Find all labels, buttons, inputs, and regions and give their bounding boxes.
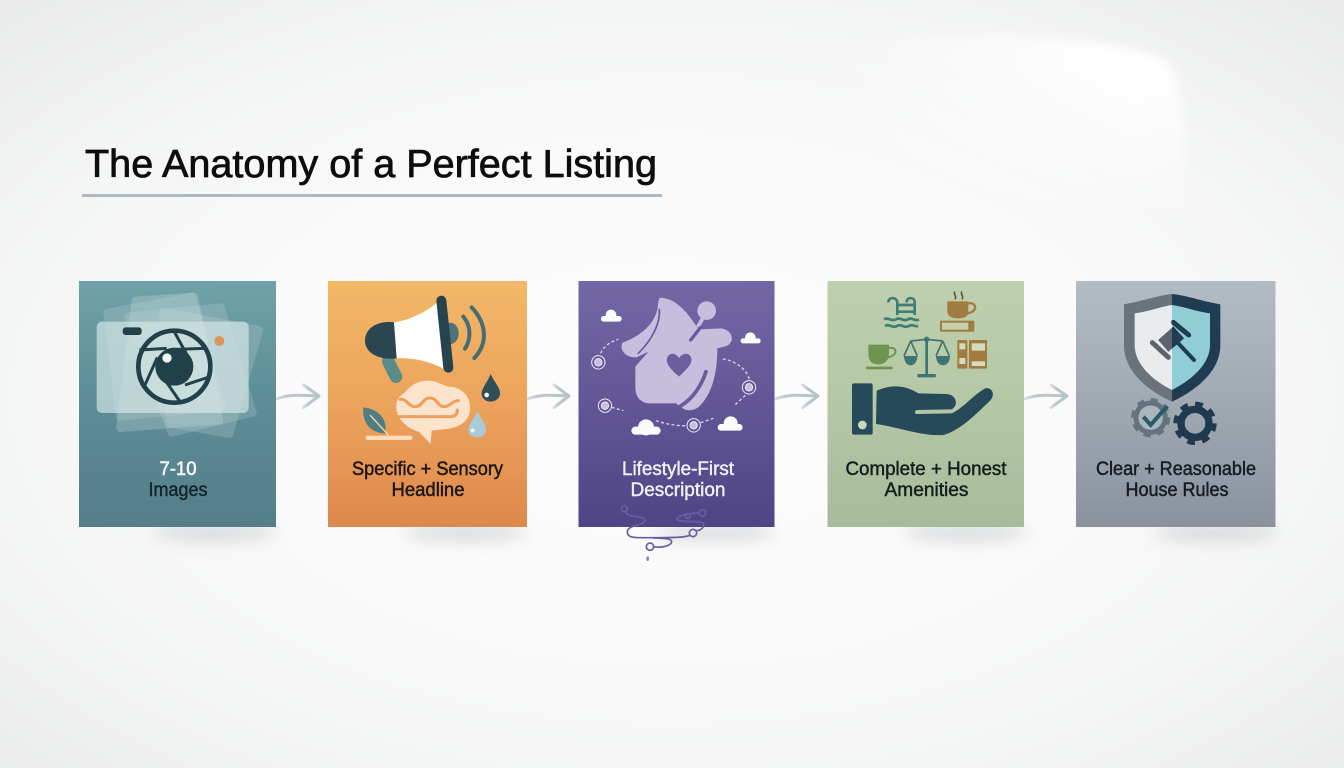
label: Lifestyle-First Description: Description <box>630 480 726 501</box>
label: 7-10 Images: 7-10 <box>160 459 196 480</box>
arrow 2 <box>527 385 569 408</box>
icon: camera with stacked photos <box>97 297 259 434</box>
label: Lifestyle-First Description <box>622 459 735 501</box>
icon: brain speech bubble, leaf and drops <box>363 374 500 444</box>
label: Specific + Sensory Headline <box>352 459 503 501</box>
label: 7-10 Images: Images <box>148 480 208 501</box>
panel: description <box>578 281 774 527</box>
icon: dark gear <box>1177 405 1213 442</box>
label: Lifestyle-First Description: Lifestyle-First <box>622 459 735 480</box>
icon: green cup <box>866 345 895 369</box>
label: Complete + Honest Amenities: Amenities <box>884 480 968 501</box>
label: Complete + Honest Amenities: Complete + Honest <box>846 459 1007 480</box>
card shadows <box>153 525 1277 541</box>
panel: house rules <box>1076 281 1276 527</box>
label: Clear + Reasonable House Rules: Clear + Reasonable <box>1096 459 1256 480</box>
label: Specific + Sensory Headline: Specific + Sensory <box>352 459 503 480</box>
arrow 3 <box>775 385 818 408</box>
icon: squiggle connector below description <box>621 506 706 561</box>
icon: shield with gavel <box>1124 294 1220 402</box>
icon: lifestyle house with heart <box>592 298 761 435</box>
icon: books <box>957 340 987 369</box>
icon: balance scale <box>904 337 950 377</box>
label: Clear + Reasonable House Rules <box>1096 459 1256 501</box>
panel: headline <box>328 281 527 527</box>
icon: coffee on book <box>941 292 975 331</box>
label: Clear + Reasonable House Rules: House Rules <box>1126 480 1228 501</box>
panel: 7-10 images <box>79 281 276 527</box>
arrow 1 <box>276 385 319 408</box>
icon: gear with check <box>1133 400 1168 435</box>
icon: pool ladder <box>884 298 919 327</box>
panel: amenities <box>828 281 1024 527</box>
label: Specific + Sensory Headline: Headline <box>392 480 464 501</box>
label: Complete + Honest Amenities <box>846 459 1007 501</box>
icon: megaphone <box>365 301 484 377</box>
arrow 4 <box>1024 385 1067 408</box>
title: The Anatomy of a Perfect Listing <box>85 143 657 186</box>
label: 7-10 Images <box>148 459 208 501</box>
icon: open hand <box>852 383 993 435</box>
